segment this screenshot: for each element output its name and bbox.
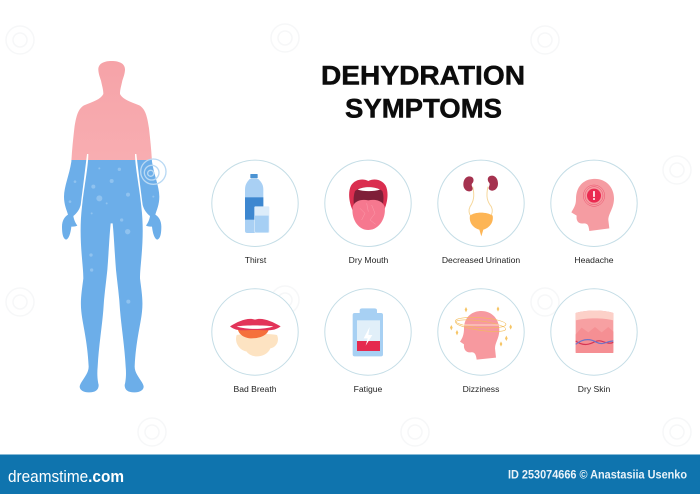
symptom: decreased urination: Decreased Urination [442, 255, 520, 265]
symptom: headache [551, 160, 637, 265]
human body figure [62, 61, 166, 392]
symptom: thirst [212, 160, 298, 265]
footer credit: ID 253074666 © Anastasiia Usenko [508, 470, 687, 482]
symptom: headache: Headache [574, 255, 614, 265]
symptom: dizziness: Dizziness [463, 384, 499, 394]
symptom: dry skin [551, 289, 637, 394]
symptom: decreased urination [438, 160, 524, 265]
title [321, 60, 525, 124]
symptom: dry mouth: Dry Mouth [349, 255, 389, 265]
symptom: bad breath [212, 289, 298, 394]
symptom: fatigue: Fatigue [354, 384, 383, 394]
title: DEHYDRATION [321, 60, 525, 90]
footer logo: dreamstime.com [8, 468, 124, 486]
symptom: dizziness [438, 289, 524, 394]
footer bar [0, 454, 700, 494]
symptom: thirst: Thirst [245, 255, 267, 265]
symptom: dry skin: Dry Skin [578, 384, 610, 394]
symptom: fatigue [325, 289, 411, 394]
title: SYMPTOMS [345, 94, 502, 124]
symptom: bad breath: Bad Breath [234, 384, 277, 394]
symptom: dry mouth [325, 160, 411, 265]
